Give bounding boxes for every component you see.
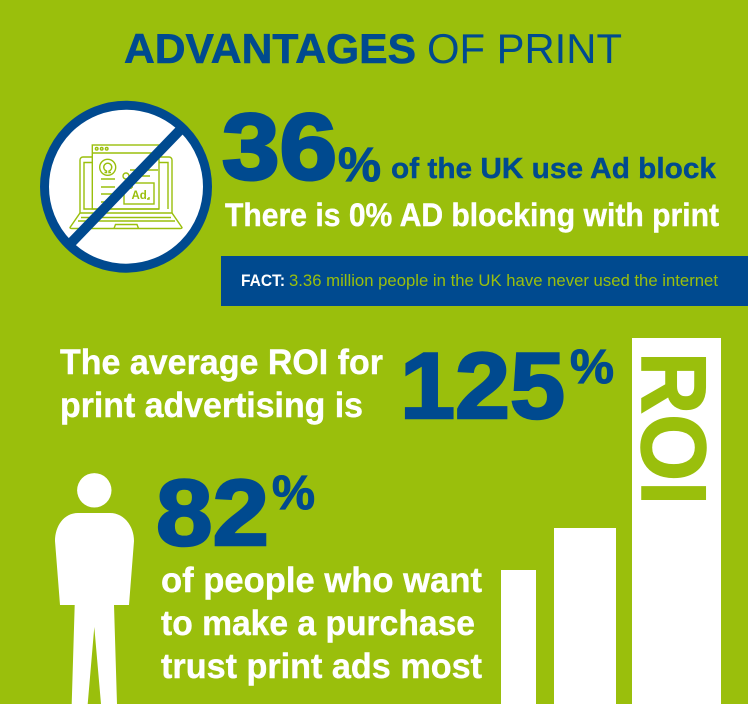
title: [124, 25, 622, 72]
stat: 82 percent: 82: [156, 460, 269, 565]
stat: 36 percent of the UK use Ad block: 36: [222, 94, 337, 199]
stat: 125 percent: %: [570, 341, 614, 394]
icon: person silhouette: [55, 473, 134, 704]
icon: prohibition slash: [71, 129, 181, 243]
stat: 82 percent: %: [272, 467, 315, 520]
text: zero percent ad blocking with print: There is 0% AD blocking with print: [225, 197, 719, 233]
fact banner: FACT:: [241, 272, 285, 290]
text: people who trust print ads: trust print ads most: [161, 647, 482, 686]
stat: 82 percent: [156, 460, 315, 565]
stat: 125 percent: 125: [400, 333, 565, 438]
fact banner: [221, 256, 748, 306]
stat: 36 percent of the UK use Ad block: %: [338, 139, 381, 192]
fact banner: 3.36 million people in the UK have never used the internet: [289, 272, 718, 290]
text: people who trust print ads: [161, 561, 482, 686]
icon: Ad label: Ad: [132, 190, 147, 202]
text: people who trust print ads: of people who want: [161, 561, 482, 600]
title: OF PRINT: [427, 25, 622, 72]
text: average ROI for print advertising: [60, 343, 383, 425]
bar chart: rising ROI: [501, 338, 724, 704]
text: average ROI for print advertising: print advertising is: [60, 386, 363, 425]
icon: laptop and browser window: [70, 145, 182, 228]
title: ADVANTAGES: [124, 25, 416, 72]
bar label: ROI: ROI: [622, 352, 724, 505]
text: average ROI for print advertising: The average ROI for: [60, 343, 383, 382]
icon: laptop ad with prohibition sign: [44, 105, 208, 268]
text: people who trust print ads: to make a purchase: [161, 604, 475, 643]
stat: 36 percent of the UK use Ad block: of the UK use Ad block: [391, 153, 717, 185]
stat: 36 percent of the UK use Ad block: [222, 94, 717, 199]
